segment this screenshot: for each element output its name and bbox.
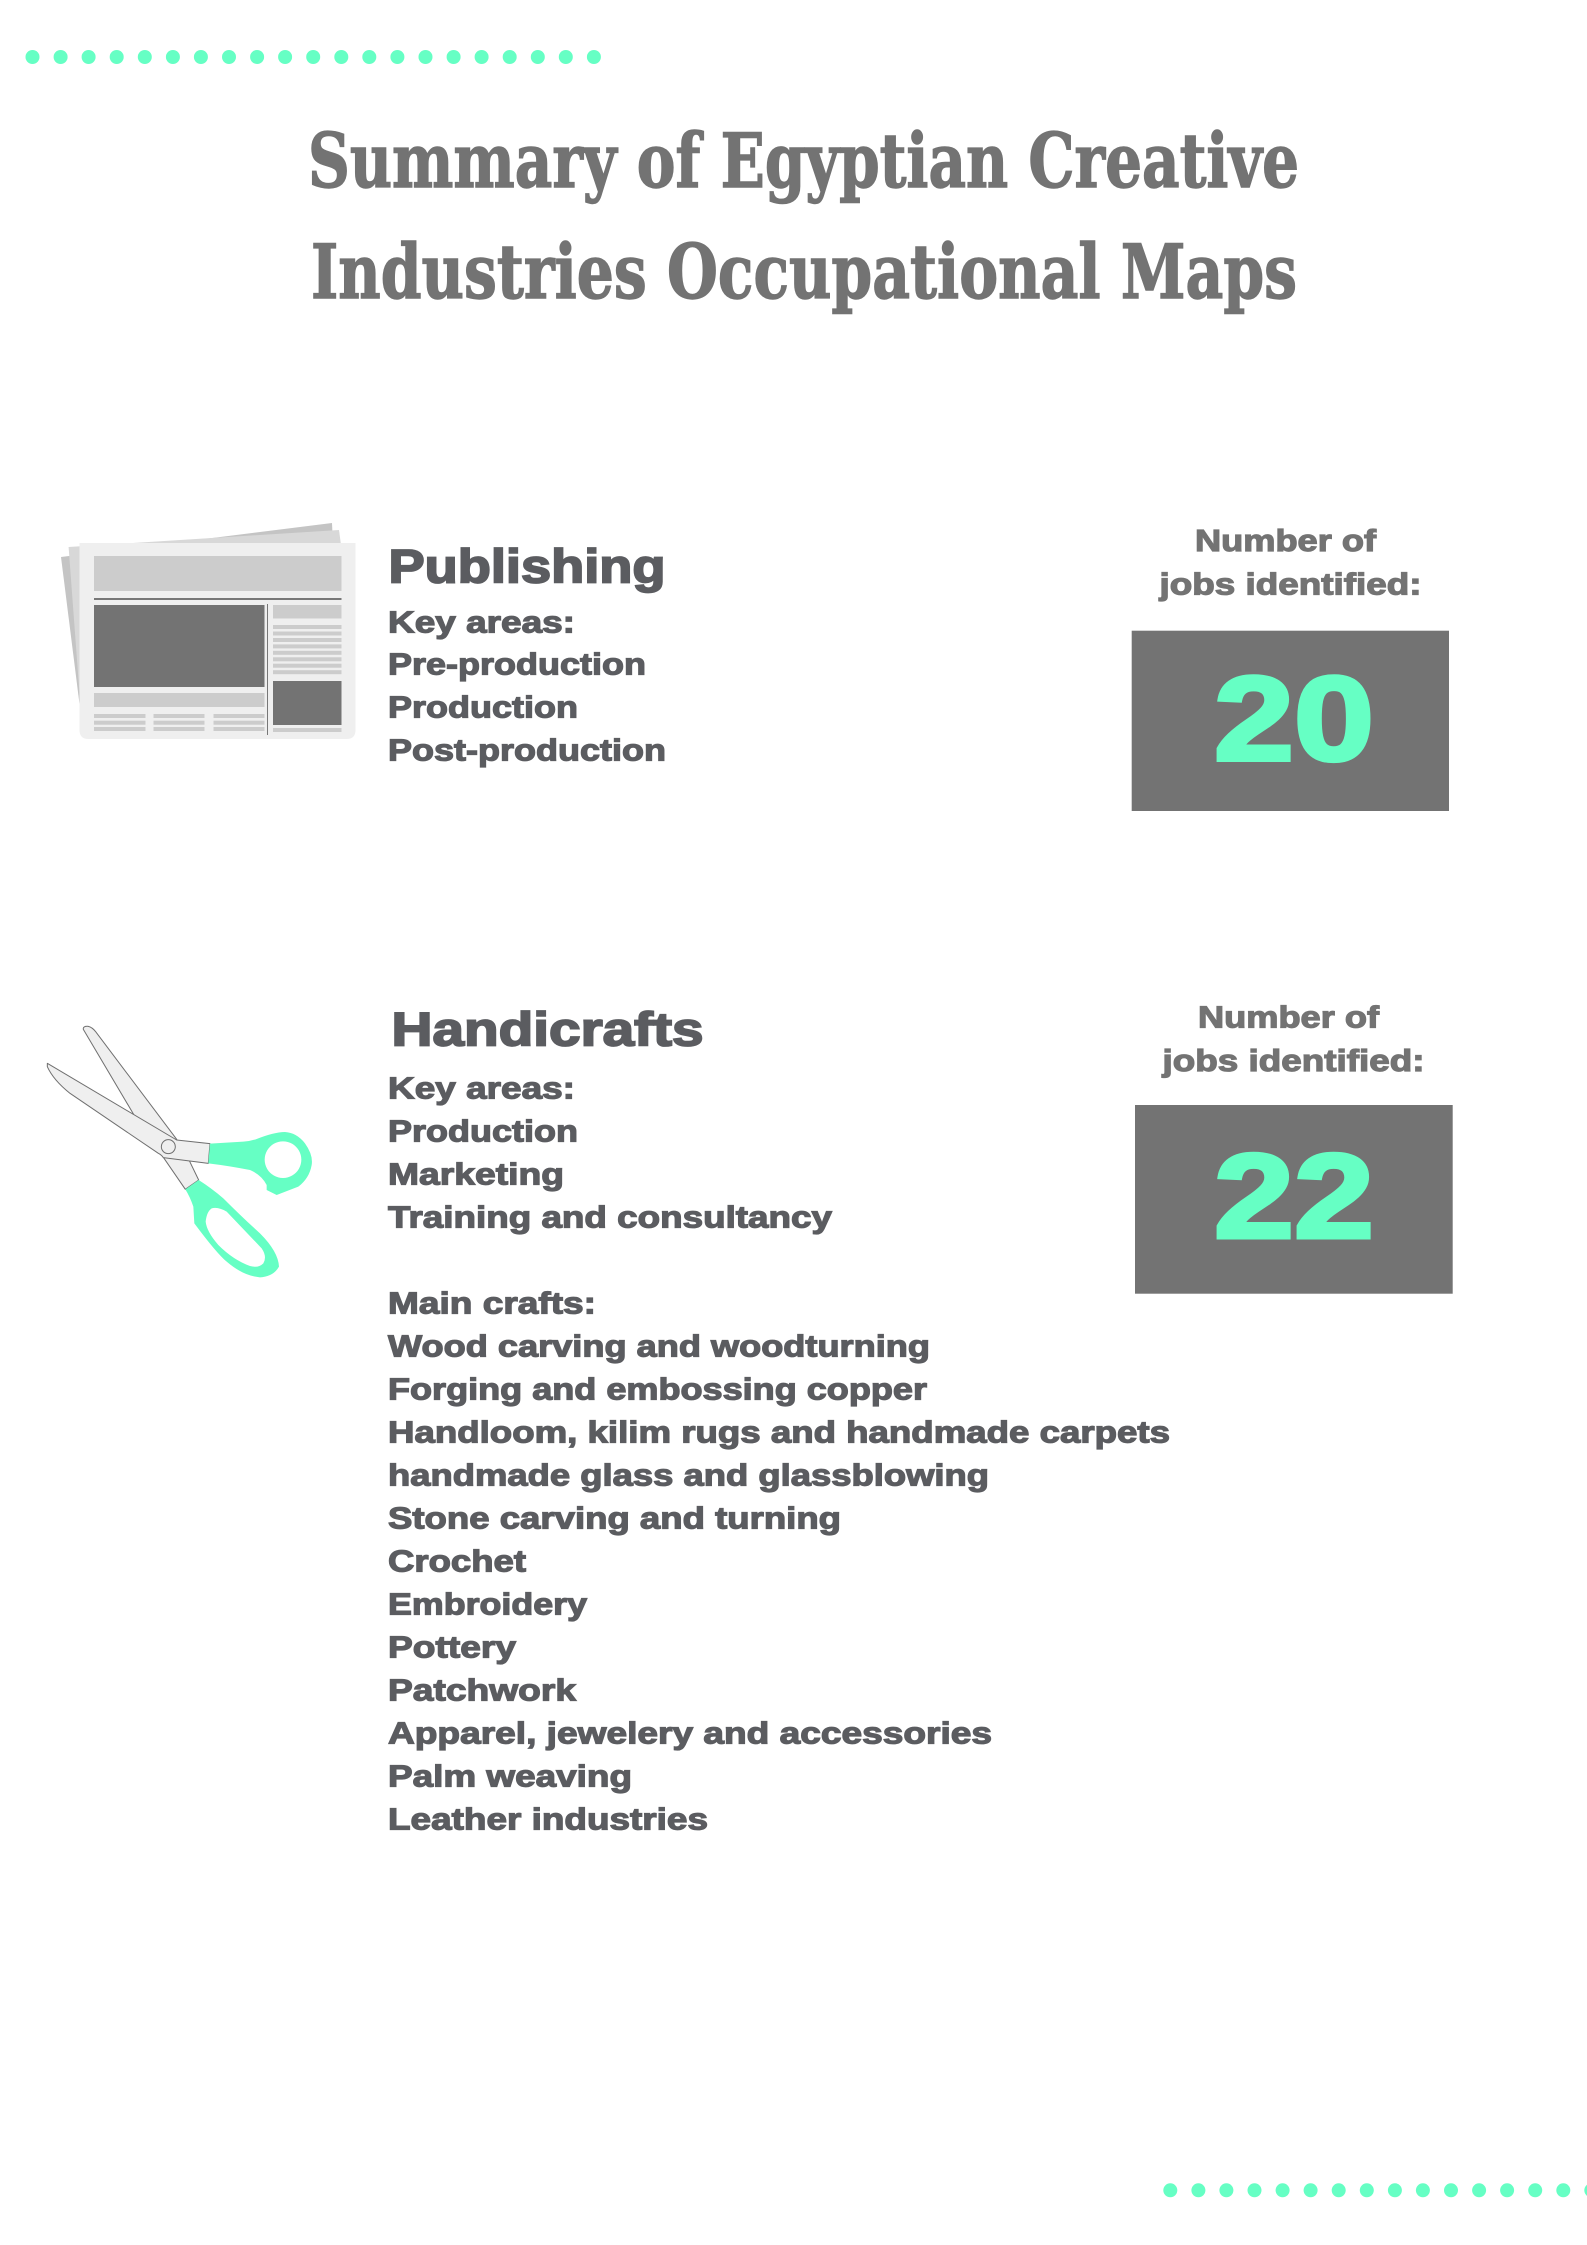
label: number of jobs identified: jobs identified: bbox=[1161, 1043, 1424, 1078]
label: number of jobs identified: jobs identified: bbox=[1158, 566, 1422, 602]
label: number of jobs identified bbox=[1158, 523, 1422, 602]
text block: main crafts list: Crochet bbox=[388, 1543, 526, 1578]
title: Industries Occupational Maps bbox=[311, 228, 1297, 316]
text block: main crafts list: Apparel, jewelery and accessories bbox=[388, 1715, 992, 1750]
heading: Handicrafts: Handicrafts bbox=[392, 1002, 704, 1056]
text block: main crafts list: Pottery bbox=[388, 1629, 517, 1664]
text block: main crafts list: Patchwork bbox=[388, 1672, 577, 1707]
text block: main crafts list: Stone carving and turning bbox=[388, 1500, 841, 1535]
stat box: 22 jobs bbox=[1135, 1105, 1453, 1294]
text block: main crafts list: Wood carving and woodturning bbox=[388, 1328, 930, 1363]
text block: main crafts list: Leather industries bbox=[388, 1801, 708, 1836]
stat box: 20 jobs: 20 bbox=[1214, 652, 1374, 786]
text block: handicrafts key areas: Training and consultancy bbox=[388, 1199, 833, 1234]
text block: handicrafts key areas: Production bbox=[388, 1113, 578, 1148]
decorative dot row: bottom right bbox=[1163, 2183, 1587, 2197]
text block: handicrafts key areas: Marketing bbox=[388, 1156, 564, 1191]
title bbox=[308, 117, 1299, 316]
label: number of jobs identified: Number of bbox=[1198, 1000, 1380, 1034]
stat box: 20 jobs bbox=[1132, 631, 1449, 811]
text block: main crafts list: Forging and embossing copper bbox=[388, 1371, 927, 1406]
text block: main crafts list: handmade glass and glassblowing bbox=[388, 1457, 989, 1492]
label: number of jobs identified: Number of bbox=[1195, 523, 1377, 558]
text block: publishing key areas: Pre-production bbox=[388, 647, 646, 682]
label: number of jobs identified bbox=[1161, 1000, 1424, 1078]
text block: main crafts list: Palm weaving bbox=[388, 1758, 632, 1793]
icon: scissors bbox=[47, 1026, 312, 1277]
heading: Publishing: Publishing bbox=[388, 540, 666, 592]
text block: publishing key areas: Production bbox=[388, 690, 578, 725]
panel: handicrafts bbox=[47, 1000, 1453, 1836]
text block: handicrafts key areas: Key areas: bbox=[388, 1070, 575, 1105]
text block: publishing key areas bbox=[388, 604, 666, 768]
icon: newspaper bbox=[61, 523, 356, 739]
text block: handicrafts key areas bbox=[388, 1070, 833, 1234]
decorative dot row: top left bbox=[26, 50, 601, 64]
title: Summary of Egyptian Creative bbox=[308, 117, 1299, 205]
text block: main crafts list bbox=[388, 1285, 1170, 1836]
text block: main crafts list: Main crafts: bbox=[388, 1285, 596, 1320]
text block: publishing key areas: Key areas: bbox=[388, 604, 575, 640]
text block: main crafts list: Embroidery bbox=[388, 1586, 588, 1621]
text block: publishing key areas: Post-production bbox=[388, 733, 666, 768]
text block: main crafts list: Handloom, kilim rugs and handmade carpets bbox=[388, 1414, 1170, 1449]
panel: publishing bbox=[61, 523, 1449, 811]
stat box: 22 jobs: 22 bbox=[1214, 1130, 1374, 1264]
